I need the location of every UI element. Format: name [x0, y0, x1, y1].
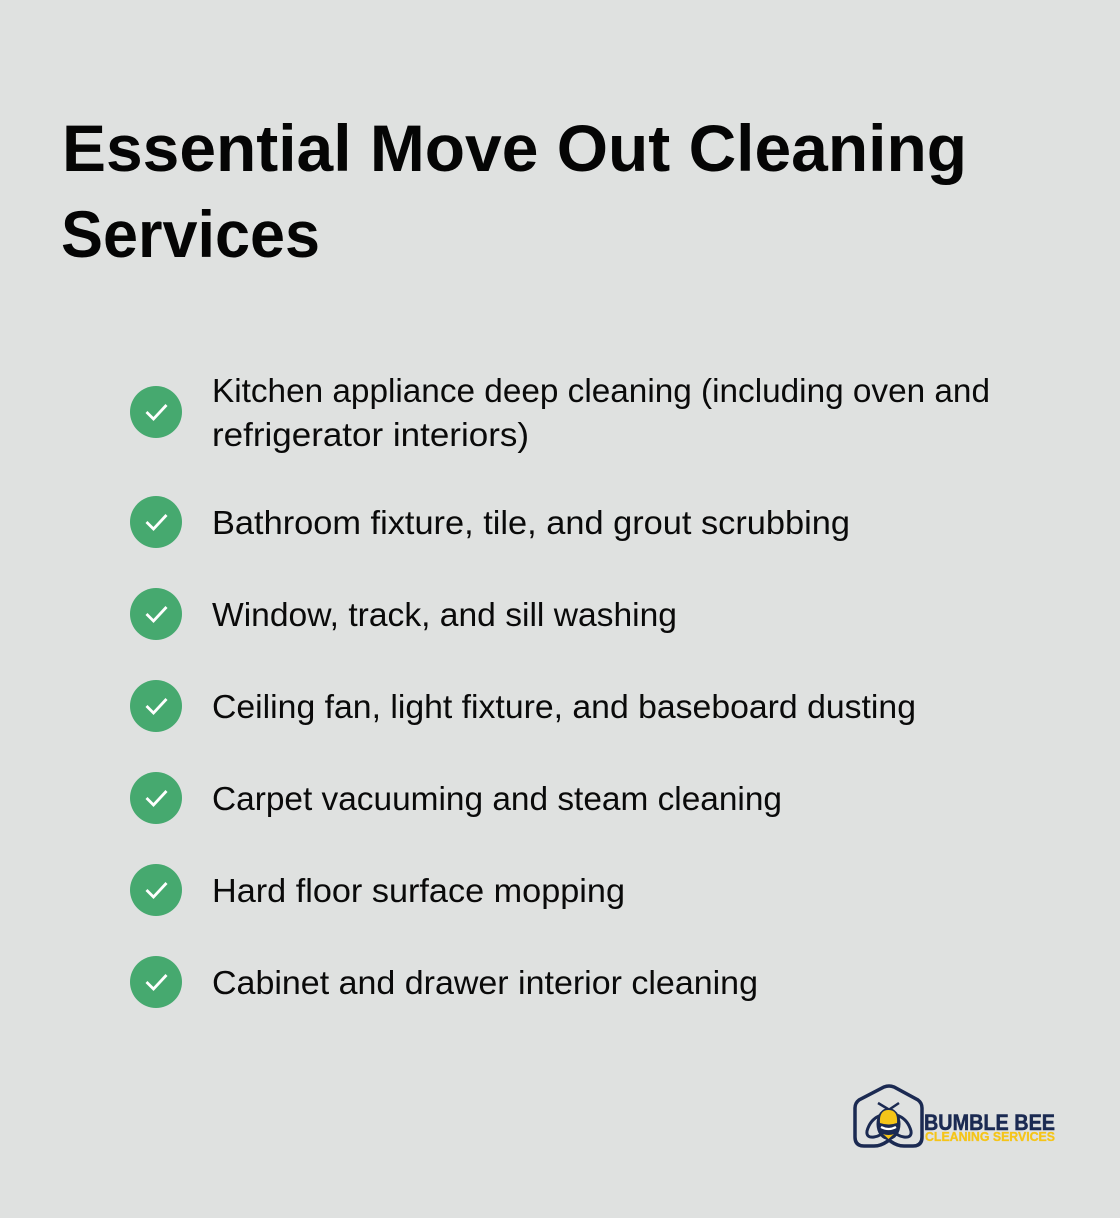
logo: Bumble Bee Cleaning Services [855, 1086, 1055, 1146]
icon: house with bee [855, 1086, 922, 1146]
item: kitchen appliances: refrigerator interiors) [212, 417, 529, 454]
checklist [130, 373, 990, 1008]
item: ceiling fan [130, 680, 916, 732]
title: Essential Move Out Cleaning [62, 111, 967, 185]
item: carpet: Carpet vacuuming and steam cleaning [212, 781, 782, 818]
item: cabinets: Cabinet and drawer interior cleaning [212, 965, 758, 1002]
item: windows: Window, track, and sill washing [212, 597, 677, 634]
item: ceiling fan: Ceiling fan, light fixture, and baseboard dusting [212, 689, 916, 726]
title [61, 111, 967, 271]
item: kitchen appliances [130, 373, 990, 454]
item: bathroom [130, 496, 850, 548]
item: bathroom: Bathroom fixture, tile, and grout scrubbing [212, 505, 850, 542]
item: hard floor: Hard floor surface mopping [212, 873, 625, 910]
item: hard floor [130, 864, 625, 916]
title: Services [61, 197, 320, 271]
wordmark: BUMBLE BEE [924, 1110, 1055, 1135]
item: cabinets [130, 956, 758, 1008]
item: carpet [130, 772, 782, 824]
item: windows [130, 588, 677, 640]
item: kitchen appliances: Kitchen appliance deep cleaning (including oven and [212, 373, 990, 410]
tagline: CLEANING SERVICES [925, 1130, 1055, 1144]
